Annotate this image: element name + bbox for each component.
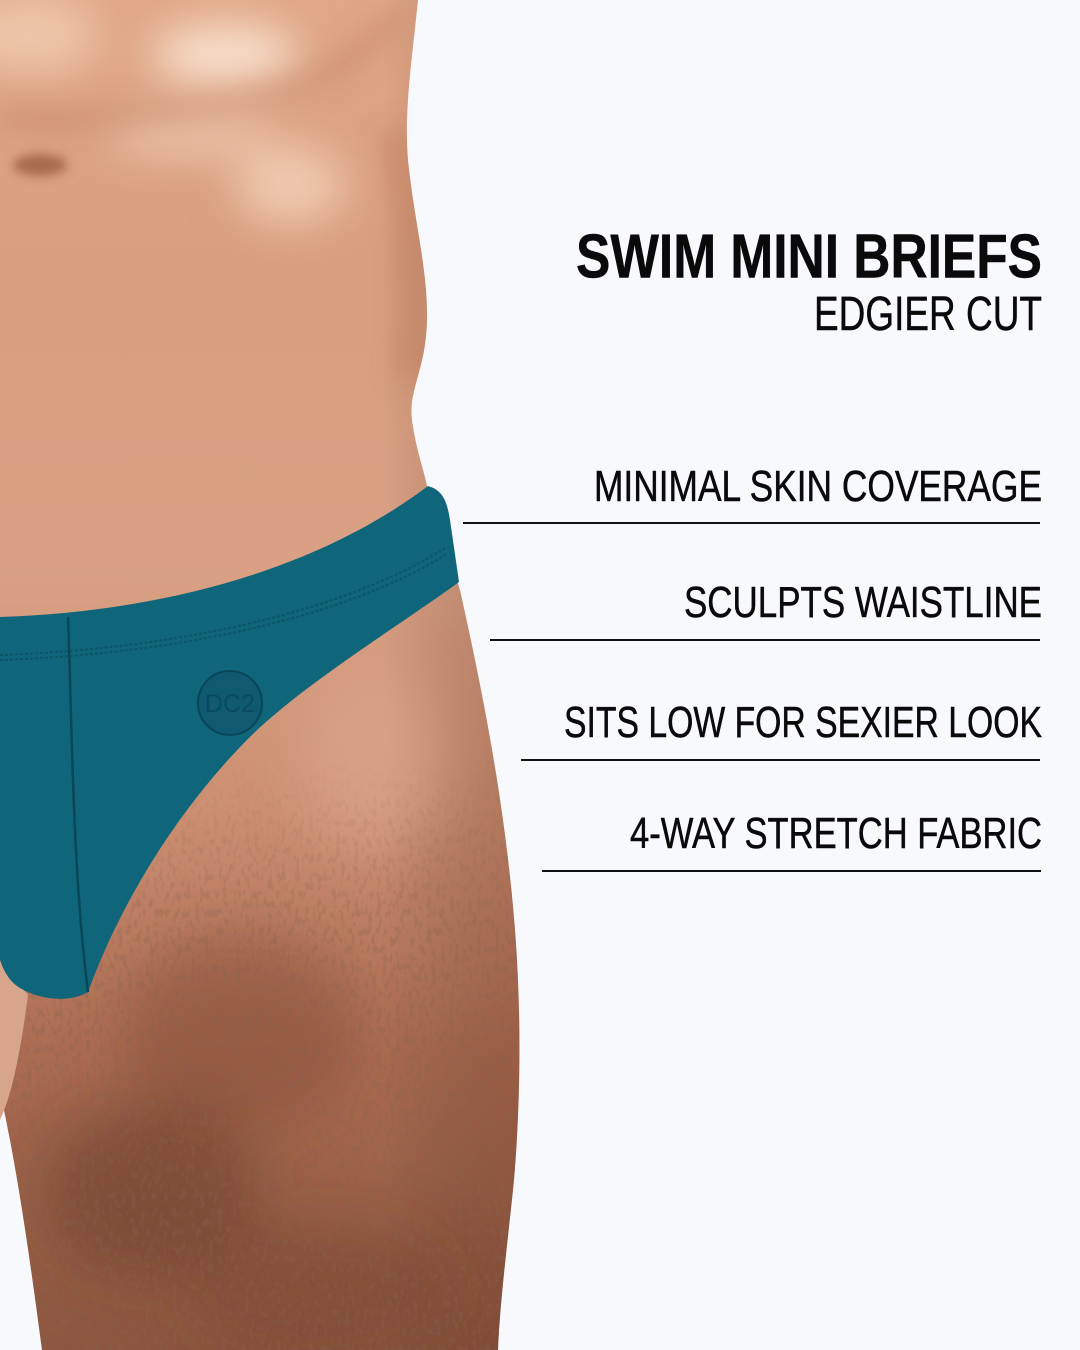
- other leg: [0, 960, 28, 1120]
- chest and abdomen shadows: [0, 10, 417, 380]
- logo badge: [198, 671, 262, 735]
- garment body: [0, 486, 459, 999]
- swim mini briefs: [0, 486, 459, 999]
- torso and leg silhouette: [0, 0, 530, 1350]
- navel: [13, 154, 67, 176]
- logo badge: DC2: [205, 690, 255, 718]
- figure: model wearing briefs: [0, 0, 530, 1350]
- thigh shading: [40, 670, 450, 1350]
- centre seam: [68, 617, 88, 992]
- chest highlights: [0, 0, 345, 223]
- hair texture: [4, 820, 520, 1346]
- waistband stitching: [0, 548, 445, 655]
